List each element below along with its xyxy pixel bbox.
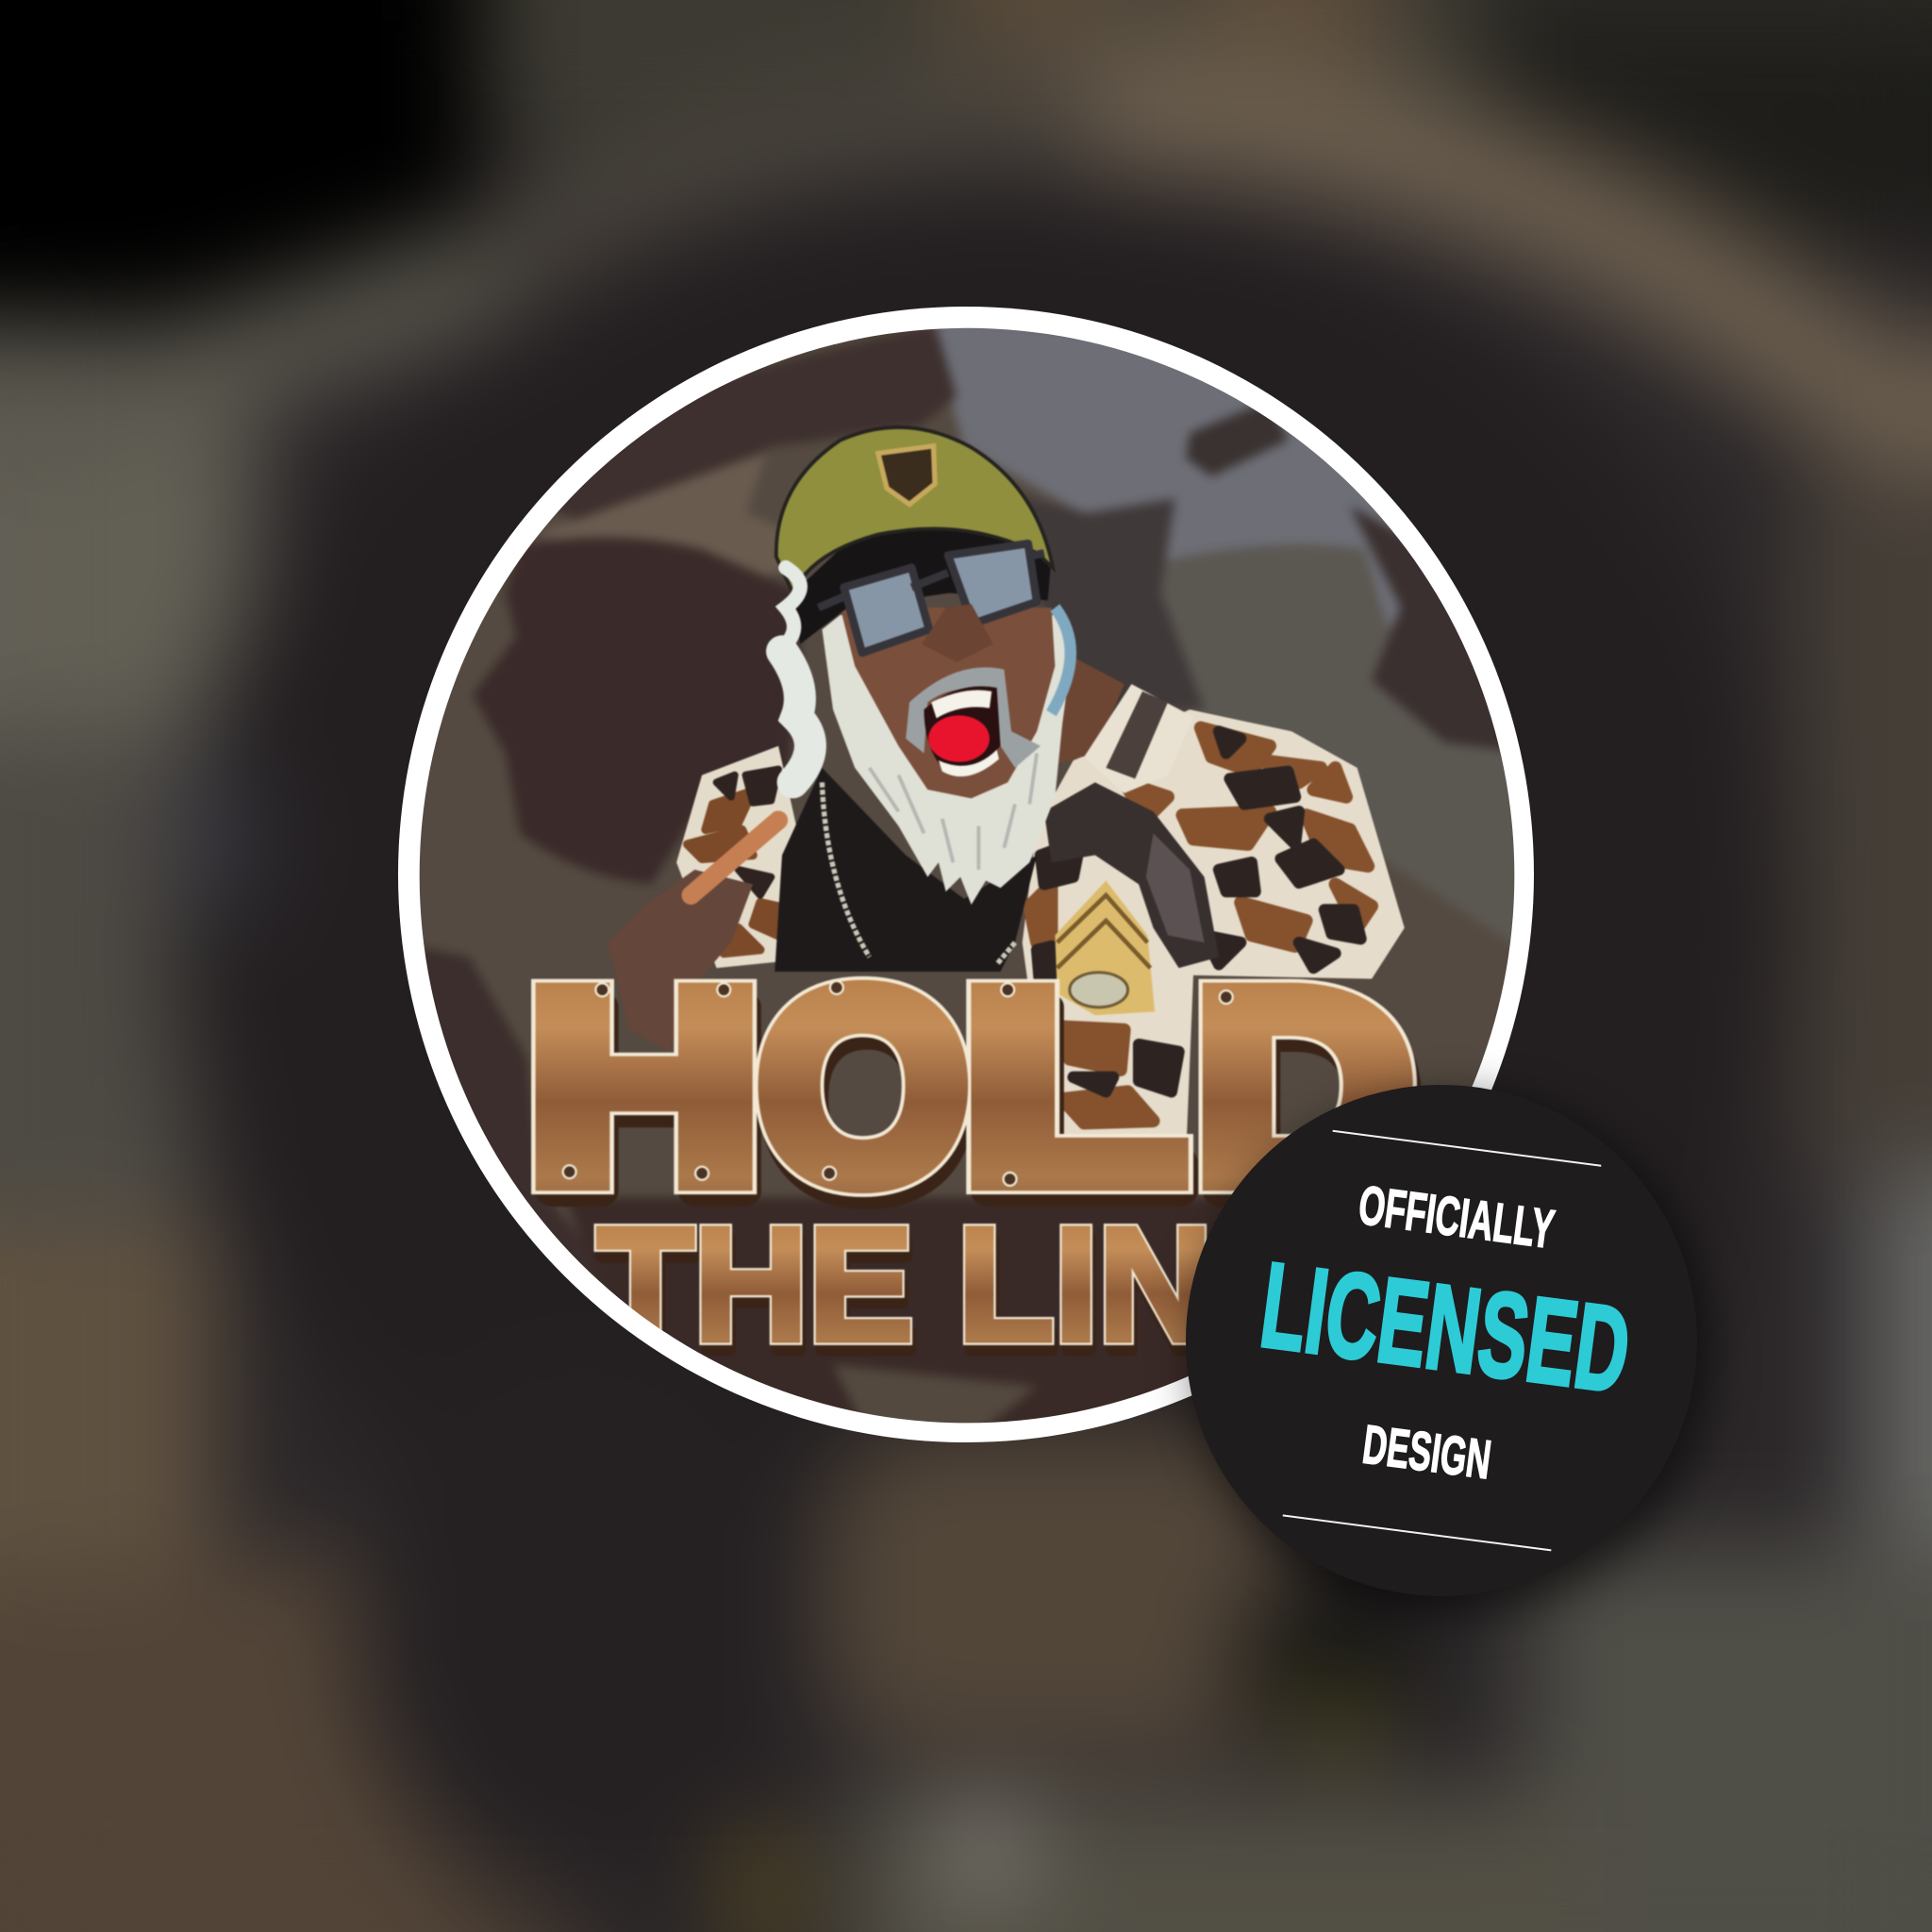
top rule [1333, 1130, 1601, 1167]
necklace chain [822, 782, 1015, 964]
helmet [776, 427, 1053, 593]
lapel shading [1044, 782, 1219, 968]
HOLD lettering: D [1195, 937, 1412, 1237]
HOLD lettering: D [1195, 937, 1412, 1237]
dark camo blobs [1037, 731, 1361, 1091]
badge disc [1186, 1085, 1697, 1596]
white ring [398, 307, 1534, 1442]
word: design: DESIGN [1359, 1414, 1494, 1491]
HOLD lettering: O [758, 937, 968, 1237]
hand [608, 870, 753, 1052]
photo circle with white ring [396, 302, 1538, 1443]
moustache [906, 667, 1041, 768]
HOLD lettering: D [1200, 949, 1417, 1249]
word: officially: OFFICIALLY [1356, 1174, 1557, 1260]
badge contents rotated [1236, 1124, 1652, 1557]
black shirt [774, 768, 1037, 972]
THE LINE lettering: THE LINE [597, 1194, 1318, 1374]
t-shirt print photo [396, 302, 1538, 1443]
neck [1037, 651, 1124, 768]
beard [822, 615, 1074, 905]
right jacket camo [1023, 709, 1405, 1154]
HOLD lettering: L [962, 937, 1184, 1237]
brown camo blobs [1029, 727, 1372, 1123]
helmet shadow hair [793, 521, 1052, 644]
HOLD lettering: L [962, 937, 1184, 1237]
HOLD lettering: H [532, 949, 764, 1249]
left jacket sleeve [675, 745, 797, 969]
bottom rule [1283, 1514, 1551, 1551]
earpiece [1052, 608, 1071, 713]
THE LINE lettering: THE LINE [597, 1194, 1318, 1374]
HOLD lettering: L [967, 949, 1189, 1249]
HOLD lettering: O [763, 949, 972, 1249]
rivets on HOLD [563, 981, 1233, 1186]
helmet badge [878, 446, 935, 505]
cigar [691, 820, 778, 895]
THE LINE lettering: THE LINE [600, 1205, 1321, 1385]
nose [922, 604, 993, 662]
HOLD lettering: H [528, 937, 760, 1237]
cigar smoke [782, 568, 810, 782]
HOLD lettering: H [528, 937, 760, 1237]
sunglasses [819, 543, 1044, 653]
striped collar [1084, 684, 1193, 793]
face [841, 608, 1055, 798]
open mouth [924, 686, 1001, 776]
sergeant chevron patch [1055, 881, 1155, 1015]
officially licensed badge [1186, 1085, 1697, 1596]
word: licensed: LICENSED [1254, 1238, 1637, 1419]
badge shadow [1194, 1096, 1711, 1613]
HOLD lettering [528, 937, 1417, 1249]
cartoon figure [528, 427, 1417, 1385]
camouflage fabric [396, 302, 1538, 1443]
HOLD lettering: O [758, 937, 968, 1237]
